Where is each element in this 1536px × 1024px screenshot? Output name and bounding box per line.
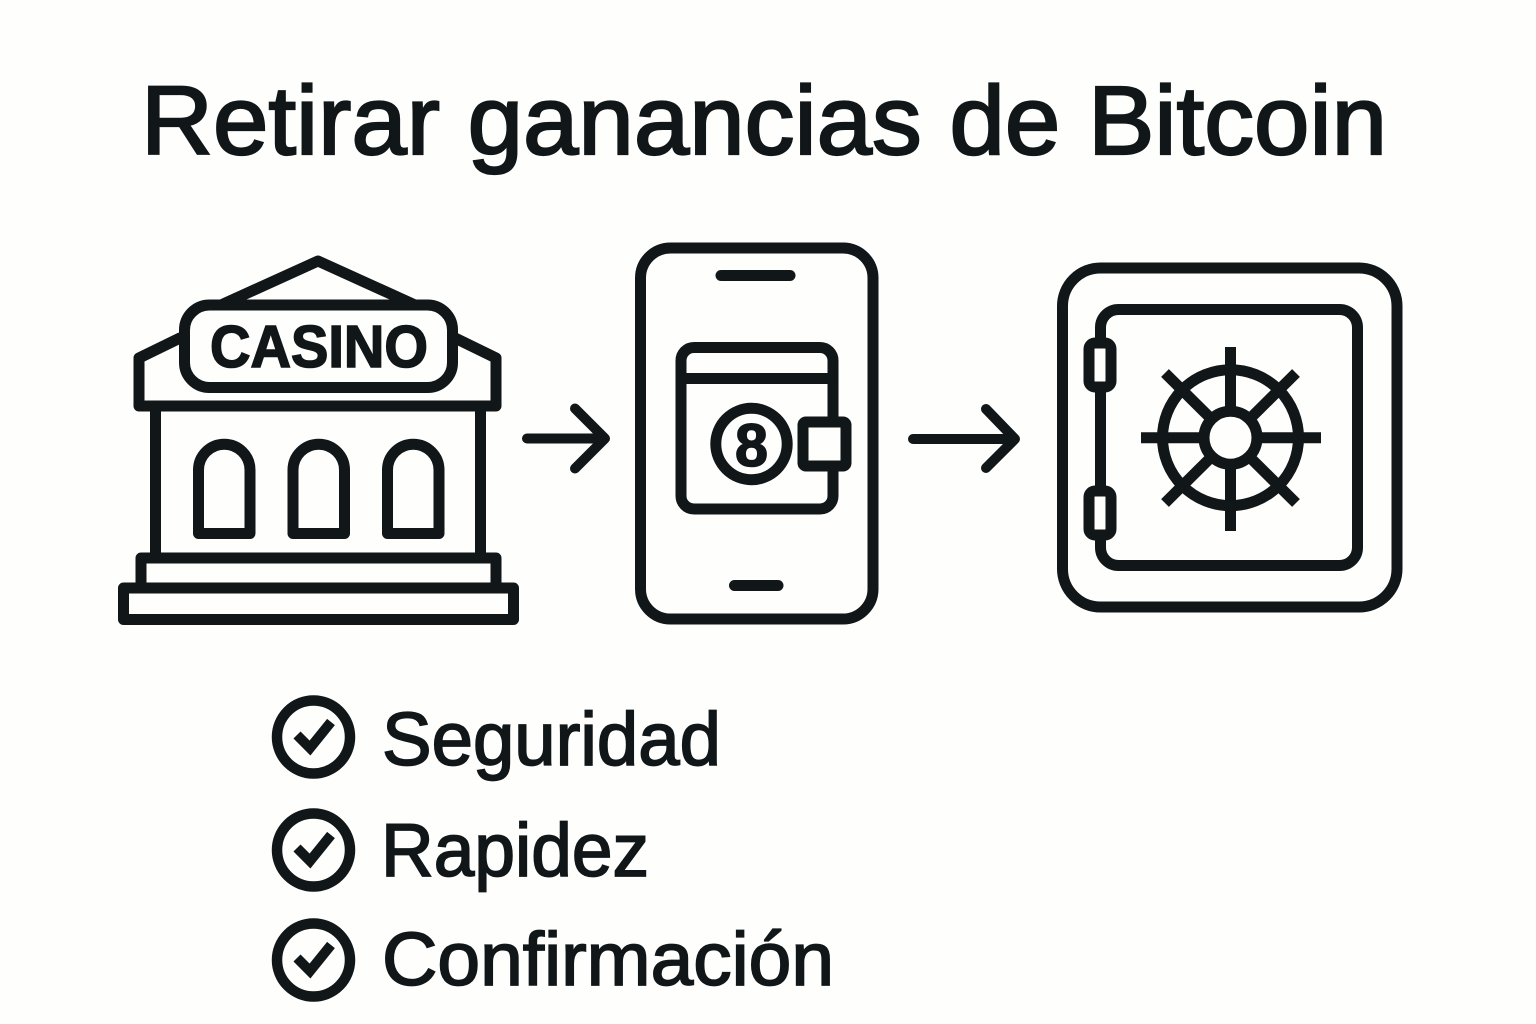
safe lower hinge — [1089, 491, 1111, 535]
safe dial ring — [1162, 370, 1298, 506]
check icon — [277, 924, 350, 996]
phone body — [640, 248, 873, 619]
phone speaker — [721, 270, 790, 281]
safe body — [1062, 268, 1397, 607]
check icon — [277, 700, 350, 774]
wallet clasp — [803, 422, 846, 466]
wallet body — [681, 348, 833, 509]
casino sign plate — [184, 305, 452, 388]
icon: casino building — [124, 261, 514, 620]
checklist — [277, 697, 834, 1001]
safe dial hub — [1204, 411, 1257, 464]
casino walls — [156, 406, 480, 558]
title: Retirar ganancias de Bitcoin — [141, 66, 1387, 175]
casino left window — [198, 444, 250, 534]
casino roof — [210, 261, 426, 310]
icon: safe — [1062, 268, 1397, 607]
safe upper hinge — [1089, 343, 1111, 387]
label: Confirmación — [382, 917, 834, 1001]
casino right window — [388, 444, 439, 534]
coin number: 8 — [735, 412, 768, 479]
icon: phone with wallet — [640, 248, 873, 619]
item: Confirmación — [277, 917, 834, 1001]
item: Rapidez — [277, 808, 649, 892]
casino centre window — [293, 444, 344, 534]
safe dial spokes — [1141, 347, 1321, 531]
phone home bar — [734, 580, 778, 591]
label: Rapidez — [381, 808, 649, 892]
arrow: wallet to safe — [913, 409, 1015, 468]
wallet band — [681, 373, 833, 384]
casino entablature — [139, 338, 496, 406]
casino base step — [124, 588, 514, 620]
item: Seguridad — [277, 697, 721, 781]
arrow: casino to wallet — [527, 408, 605, 468]
label: Seguridad — [382, 697, 721, 781]
casino upper step — [141, 558, 496, 588]
check icon — [277, 814, 350, 886]
coin ring — [716, 408, 787, 480]
safe door — [1100, 310, 1358, 566]
casino sign text: CASINO — [210, 314, 428, 380]
